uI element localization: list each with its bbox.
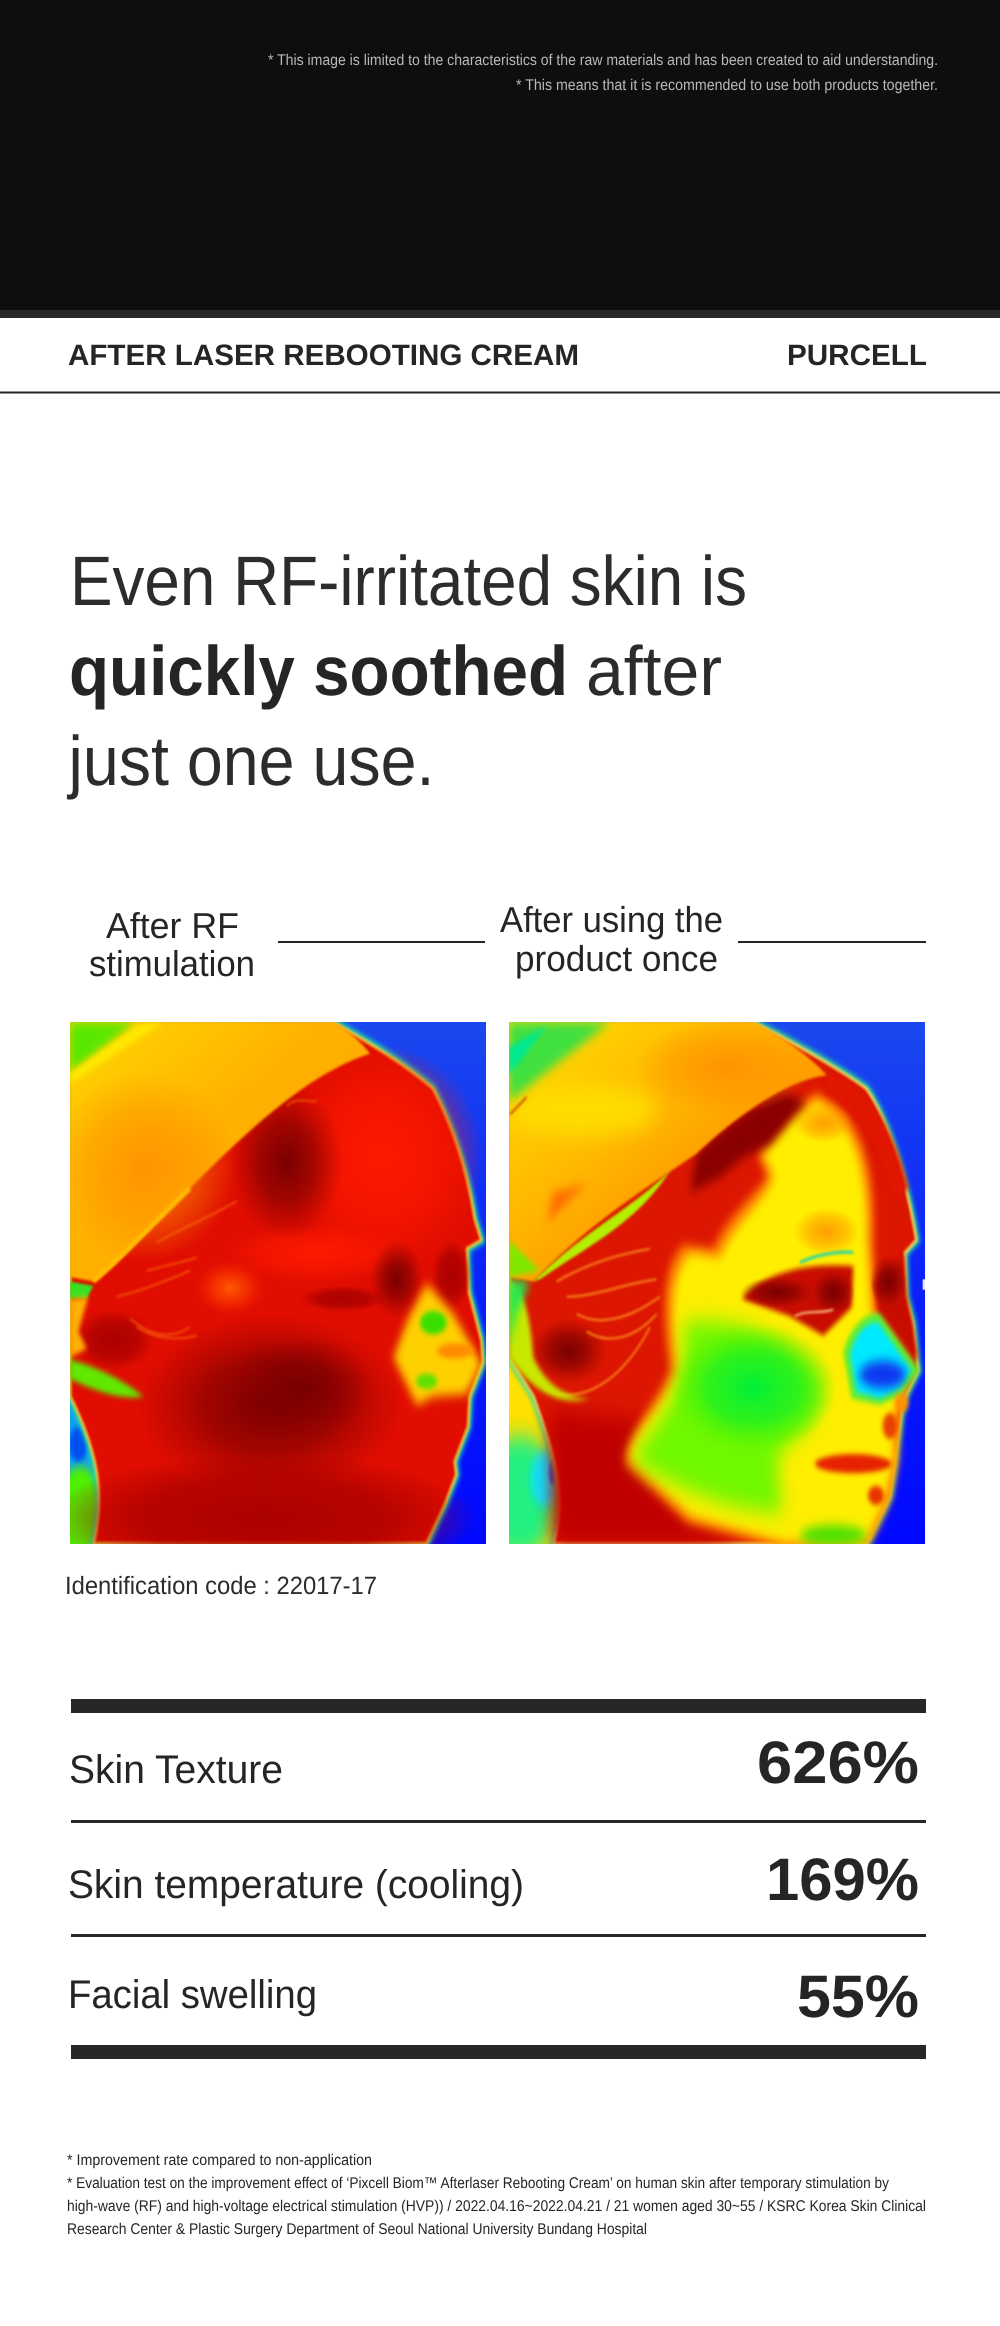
row: facial swelling: Facial swelling [68, 1973, 317, 2017]
main heading: after [586, 632, 722, 710]
footnotes: * Improvement rate compared to non-application [67, 2152, 372, 2169]
identification code: Identification code : 22017-17 [65, 1572, 377, 1600]
main heading: Even RF-irritated skin is [70, 542, 747, 620]
header bar [0, 339, 1000, 394]
row: facial swelling: 55% [797, 1963, 919, 2030]
hairline streaks [117, 1100, 317, 1338]
row: skin texture [69, 1729, 919, 1796]
column label: after using the product once [500, 899, 926, 979]
heading bold emphasis: quickly soothed [69, 632, 568, 710]
column label: after using the product once: After using the [500, 899, 723, 940]
head base fill [70, 1022, 483, 1544]
column label: after RF stimulation: After RF [106, 905, 239, 946]
yellow cooled face [632, 1101, 910, 1544]
ear and hair streaks [509, 1249, 660, 1401]
ear rim [70, 1281, 143, 1397]
head outline glow [70, 1022, 483, 1544]
far eye socket [873, 1253, 918, 1362]
orange edge of cooled face [625, 1093, 913, 1548]
disclaimer note line 1: * This image is limited to the characteristics of the raw materials and has been created to aid understanding. [268, 52, 938, 69]
main heading: just one use. [67, 722, 434, 800]
lower left background behind neck [509, 1353, 567, 1544]
column label: after using the product once: product once [515, 938, 718, 979]
head outline glow [509, 1022, 918, 1544]
row: facial swelling [68, 1963, 919, 2030]
results table [68, 1699, 926, 2059]
lower left background behind neck [70, 1392, 108, 1544]
dark hairline shadow [690, 1093, 807, 1193]
column label: after RF stimulation [89, 905, 485, 984]
eye shadow [740, 1252, 855, 1336]
row: skin texture: 626% [757, 1729, 919, 1796]
disclaimer note line 2: * This means that it is recommended to use both products together. [516, 77, 938, 94]
lips and warm spots [815, 1393, 908, 1505]
hair cap [509, 1022, 827, 1281]
head base fill [509, 1022, 918, 1544]
brand name: PURCELL [787, 339, 927, 372]
column label: after RF stimulation: stimulation [89, 943, 255, 984]
cool nose [843, 1313, 920, 1405]
row: skin temperature [68, 1846, 919, 1913]
footnotes: * Evaluation test on the improvement effect of ‘Pixcell Biom™ Afterlaser Rebooting Cream’ on human skin after temporary stimulation by [67, 2175, 889, 2192]
footnotes [67, 2152, 926, 2238]
footnotes: high-wave (RF) and high-voltage electrical stimulation (HVP)) / 2022.04.16~2022.04.21 / 21 women aged 30~55 / KSRC Korea Skin Clinical [67, 2198, 926, 2215]
thermal image: after RF stimulation [70, 1022, 486, 1544]
row: skin temperature: Skin temperature (cooling) [68, 1863, 524, 1907]
row: skin temperature: 169% [766, 1846, 919, 1913]
main heading [67, 542, 747, 800]
nose heat area [393, 1284, 482, 1405]
cool cheek [632, 1321, 867, 1546]
hair cap [70, 1022, 370, 1281]
footnotes: Research Center & Plastic Surgery Department of Seoul National University Bundang Hospital [67, 2221, 647, 2238]
heat blobs on face [50, 1045, 483, 1583]
row: skin texture: Skin Texture [69, 1748, 283, 1792]
top dark panel [0, 0, 1000, 318]
product name: AFTER LASER REBOOTING CREAM [68, 339, 579, 372]
neck shadow [550, 1409, 750, 1544]
thermal image: after using the product once [509, 1022, 925, 1544]
